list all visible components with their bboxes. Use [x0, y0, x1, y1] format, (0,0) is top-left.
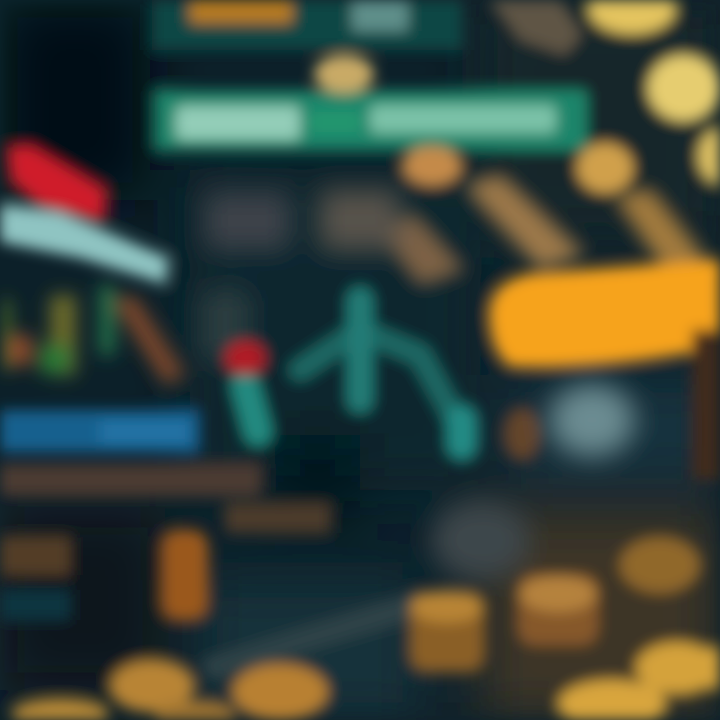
red marker — [225, 341, 265, 375]
left candlestick chart — [0, 285, 185, 385]
falling coins top right — [402, 0, 720, 193]
coin above banner — [314, 55, 374, 93]
pale teal roof — [0, 205, 168, 284]
green banner — [155, 90, 587, 150]
gold coin piles bottom — [12, 537, 720, 720]
right mid blobs — [504, 330, 720, 480]
top teal panel — [152, 0, 462, 50]
lower left orange shapes — [0, 530, 208, 620]
center lower grey — [430, 500, 530, 580]
red flag — [8, 146, 105, 222]
coin streaks — [375, 175, 715, 285]
blue band — [0, 410, 198, 452]
diagonal road — [200, 590, 430, 680]
orange block — [490, 260, 720, 367]
center grey blobs — [200, 190, 400, 360]
teal chart arrows — [245, 300, 462, 445]
brown table — [0, 464, 330, 533]
